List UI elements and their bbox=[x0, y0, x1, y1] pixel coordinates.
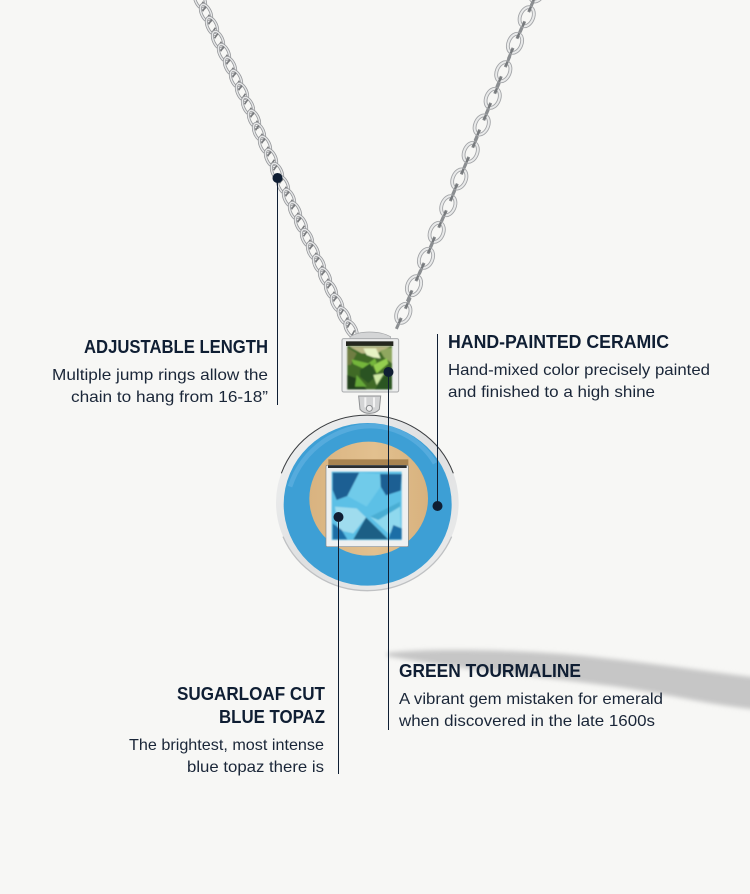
description: and finished to a high shine bbox=[448, 384, 655, 401]
right chain bbox=[390, 0, 550, 331]
heading: SUGARLOAF CUT bbox=[177, 684, 325, 704]
cast shadow bbox=[387, 650, 750, 710]
leader line bbox=[436, 334, 438, 506]
outer silver ring bbox=[276, 415, 459, 591]
blue topaz setting bbox=[326, 465, 408, 547]
marker dot bbox=[384, 367, 394, 377]
gold disc stripe bbox=[328, 459, 408, 465]
heading: BLUE TOPAZ bbox=[219, 707, 325, 727]
callout: green tourmaline bbox=[384, 367, 663, 730]
description bbox=[448, 362, 710, 401]
description: chain to hang from 16-18” bbox=[71, 389, 268, 406]
description bbox=[52, 367, 268, 406]
leader line bbox=[276, 178, 278, 405]
lower bail bbox=[359, 396, 381, 413]
description: Hand-mixed color precisely painted bbox=[448, 362, 710, 379]
green gem setting bbox=[342, 339, 399, 392]
leader line bbox=[338, 517, 340, 774]
heading: HAND-PAINTED CERAMIC bbox=[448, 332, 669, 352]
description: The brightest, most intense bbox=[129, 737, 324, 754]
description: when discovered in the late 1600s bbox=[398, 713, 655, 730]
heading: ADJUSTABLE LENGTH bbox=[84, 337, 268, 357]
marker dot bbox=[432, 501, 442, 511]
description: A vibrant gem mistaken for emerald bbox=[399, 691, 663, 708]
description: blue topaz there is bbox=[187, 759, 324, 776]
blue ceramic ring bbox=[284, 423, 452, 586]
ring highlight bbox=[290, 426, 435, 487]
gold disc bbox=[309, 442, 428, 556]
pendant bbox=[276, 332, 459, 591]
description bbox=[129, 737, 324, 776]
bail top bbox=[350, 332, 391, 343]
heading: GREEN TOURMALINE bbox=[399, 661, 581, 681]
left chain bbox=[192, 0, 360, 339]
callout: adjustable length bbox=[52, 173, 282, 406]
callout: hand-painted ceramic bbox=[432, 332, 710, 511]
callout: sugarloaf cut blue topaz bbox=[129, 512, 344, 776]
marker dot bbox=[272, 173, 282, 183]
description: Multiple jump rings allow the bbox=[52, 367, 268, 384]
heading bbox=[177, 684, 325, 727]
description bbox=[398, 691, 663, 730]
marker dot bbox=[334, 512, 344, 522]
leader line bbox=[388, 372, 390, 730]
